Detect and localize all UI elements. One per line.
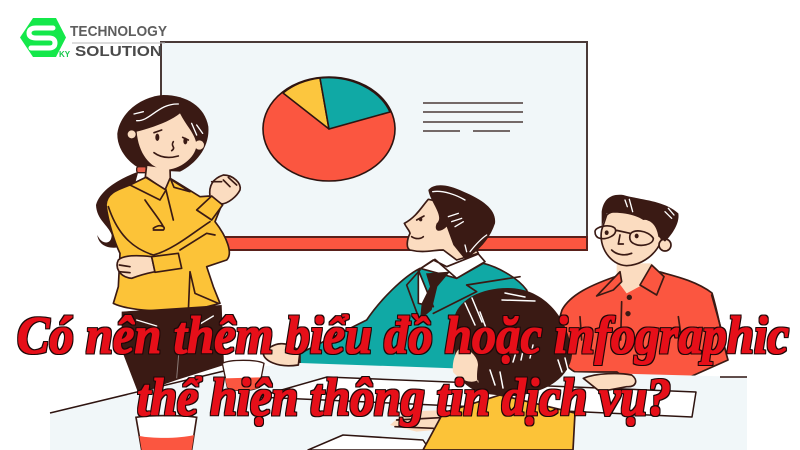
pie chart: [263, 77, 395, 181]
title: thể hiện thông tin dịch vụ?: [137, 369, 671, 427]
woman seen from behind: [423, 288, 575, 450]
logo: [20, 18, 167, 60]
cup in foreground: [136, 416, 197, 450]
logo: SOLUTION: [75, 43, 162, 60]
standing woman trousers: [122, 305, 224, 393]
logo: TECHNOLOGY: [70, 23, 167, 40]
man with glasses in red shirt: [557, 195, 728, 388]
standing woman in yellow shirt: [96, 95, 240, 312]
board text lines: [423, 103, 523, 131]
hands on table: [263, 344, 636, 432]
table: [50, 363, 747, 450]
title: [17, 307, 789, 427]
logo: KY: [59, 50, 71, 59]
cup on table: [222, 360, 264, 391]
man in teal suit: [300, 185, 547, 370]
presentation board: [161, 42, 587, 250]
paper sheets on table: [257, 377, 696, 450]
